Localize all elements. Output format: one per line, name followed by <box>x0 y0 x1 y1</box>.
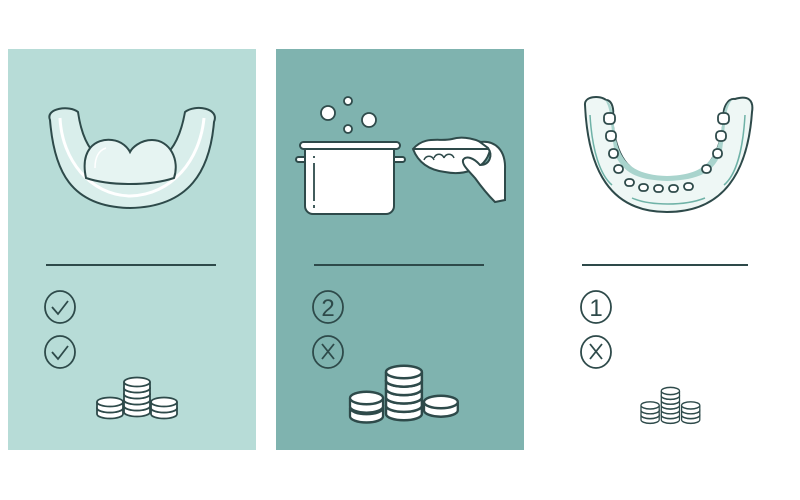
icon: hand holding mouthguard <box>413 138 505 202</box>
icon: small coins <box>641 387 700 423</box>
panel: second <box>276 49 524 450</box>
icon: cross <box>313 336 343 368</box>
panel: third <box>581 97 752 423</box>
icon: pot <box>296 142 405 214</box>
icon: check 1 <box>45 291 75 323</box>
divider <box>582 264 748 266</box>
icon: number 1 <box>581 291 611 323</box>
icon: coins <box>97 378 177 418</box>
icon: bubbles <box>321 97 376 133</box>
icon: number 2 <box>313 291 343 323</box>
icon: number 1: 1 <box>589 295 603 322</box>
icon: coins <box>350 366 458 422</box>
divider <box>314 264 484 266</box>
divider <box>46 264 216 266</box>
panel: first <box>8 49 256 450</box>
icon: check 2 <box>45 336 75 368</box>
icon: mouthguard with teeth <box>49 108 215 208</box>
icon: number 2: 2 <box>321 295 335 322</box>
icon: mouthguard arch <box>585 97 752 212</box>
icon: cross <box>581 336 611 368</box>
